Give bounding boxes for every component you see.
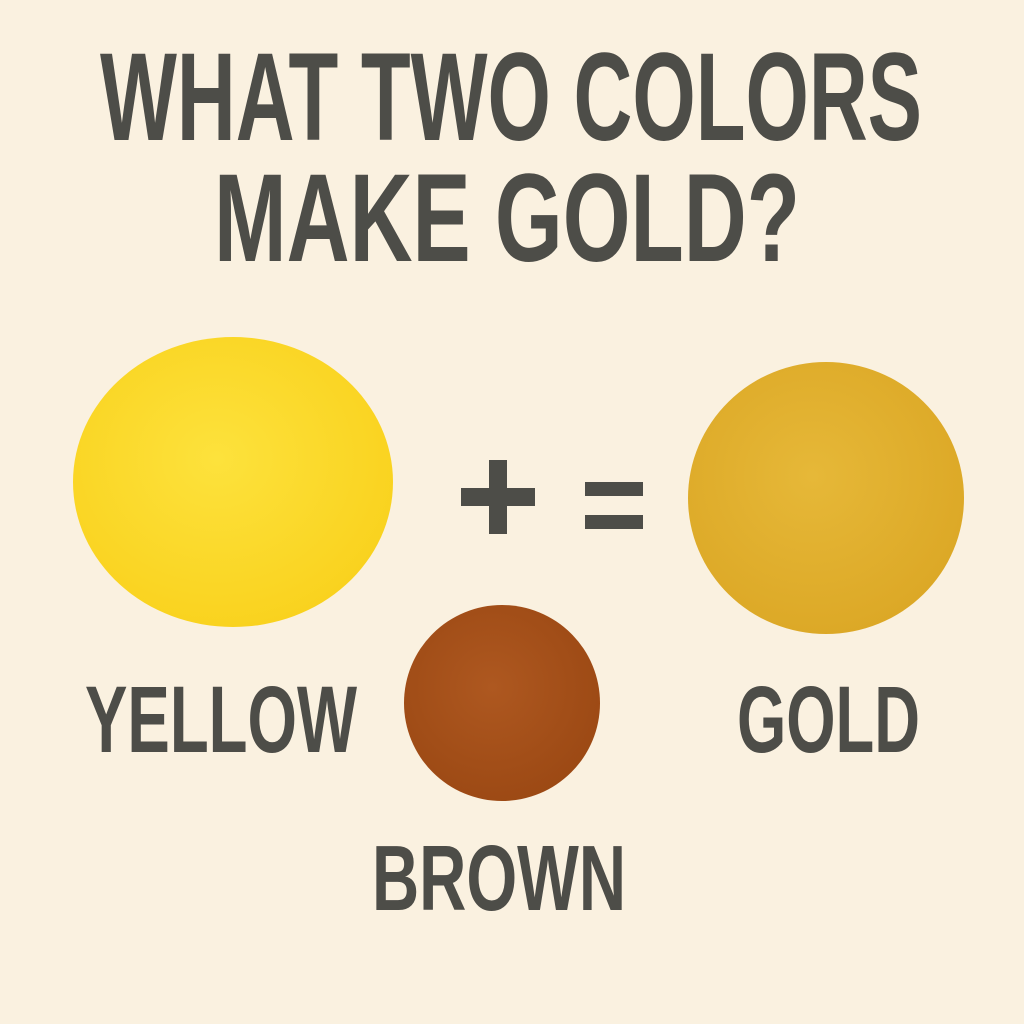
title	[100, 28, 922, 288]
equals sign	[585, 482, 643, 529]
yellow paint swatch	[73, 337, 393, 627]
label: yellow: YELLOW	[85, 667, 357, 773]
gold paint swatch	[688, 362, 964, 634]
brown paint swatch	[404, 605, 600, 801]
label: gold: GOLD	[737, 667, 920, 773]
plus sign	[461, 460, 535, 534]
label: brown: BROWN	[372, 826, 626, 930]
